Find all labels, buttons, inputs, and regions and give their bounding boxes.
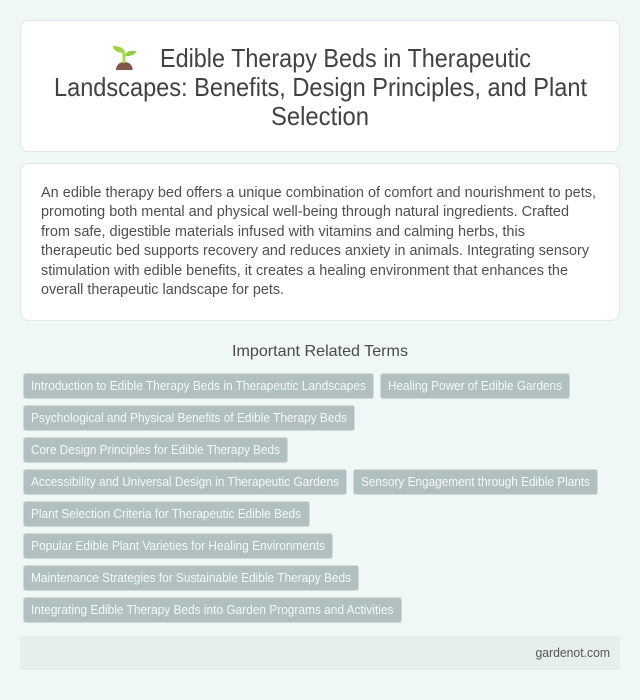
tag: Healing Power of Edible Gardens	[388, 378, 562, 393]
tag: Sensory Engagement through Edible Plants	[361, 474, 590, 489]
tag: Integrating Edible Therapy Beds into Garden Programs and Activities	[31, 602, 394, 617]
tag: Core Design Principles for Edible Therapy Beds	[31, 442, 280, 457]
tag	[24, 598, 402, 622]
icon: seedling	[113, 46, 137, 70]
tag	[24, 374, 374, 398]
tag	[24, 502, 310, 526]
tag	[24, 534, 332, 558]
tag	[24, 566, 358, 590]
title: Edible Therapy Beds in Therapeutic	[160, 43, 531, 73]
tag	[24, 438, 288, 462]
tag: Maintenance Strategies for Sustainable Edible Therapy Beds	[31, 570, 351, 585]
tag list	[24, 374, 598, 622]
footer	[20, 636, 620, 670]
tag	[380, 374, 570, 398]
tag: Accessibility and Universal Design in Therapeutic Gardens	[31, 474, 339, 489]
footer: gardenot.com	[536, 645, 610, 660]
text block: description: stimulation with edible benefits, it creates a healing environment that enhances the	[41, 262, 568, 279]
text block: description: An edible therapy bed offers a unique combination of comfort and nourishment to pets,	[41, 184, 596, 201]
title: Selection	[271, 101, 369, 131]
title: Landscapes: Benefits, Design Principles, and Plant	[54, 72, 588, 102]
text block: description: therapeutic bed supports recovery and reduces anxiety in animals. Integrating sensory	[41, 242, 589, 259]
tag: Introduction to Edible Therapy Beds in Therapeutic Landscapes	[31, 378, 366, 393]
text block: description: overall therapeutic landscape for pets.	[41, 281, 284, 298]
text block: description: promoting both mental and physical well-being through natural ingredients. Crafted	[41, 203, 569, 220]
tag	[24, 470, 346, 494]
tag	[354, 470, 598, 494]
text block: description: from safe, digestible materials infused with vitamins and calming herbs, this	[41, 223, 525, 240]
panel: description card	[20, 164, 620, 320]
tag: Plant Selection Criteria for Therapeutic Edible Beds	[31, 506, 301, 521]
tag: Psychological and Physical Benefits of Edible Therapy Beds	[31, 410, 347, 425]
heading: related terms: Important Related Terms	[232, 343, 408, 360]
tag: Popular Edible Plant Varieties for Healing Environments	[31, 538, 325, 553]
panel: title card	[20, 20, 620, 152]
title	[54, 43, 588, 131]
tag	[24, 406, 354, 430]
text block: description	[41, 184, 596, 298]
